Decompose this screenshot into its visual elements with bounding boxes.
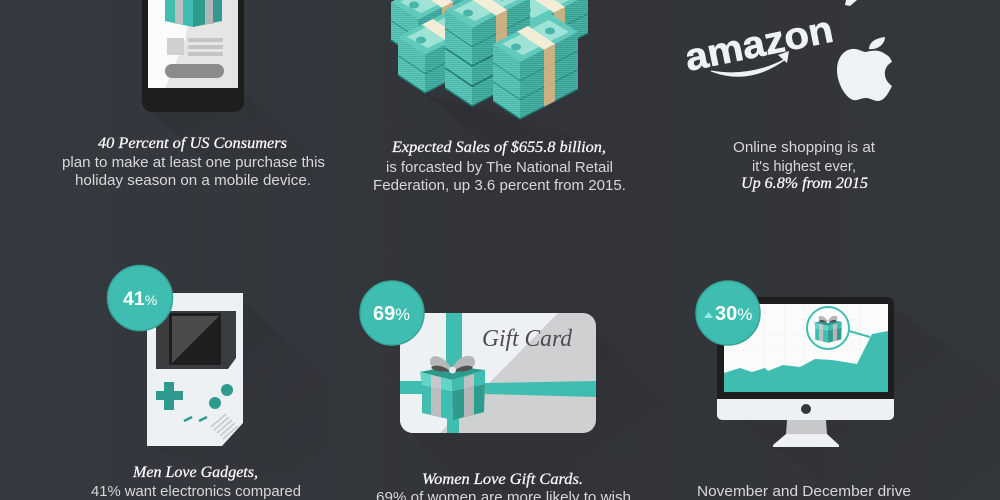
chart grid xyxy=(724,304,888,392)
text: mobile shoppers: plan to make at least one purchase this xyxy=(62,155,325,171)
text: expected sales: Federation, up 3.6 percent from 2015. xyxy=(373,178,626,194)
monitor chin xyxy=(717,399,894,420)
text: expected sales: Expected Sales of $655.8 billion, xyxy=(391,139,606,156)
magnifier lens xyxy=(807,307,870,349)
text: women love gift cards: Women Love Gift Cards. xyxy=(422,471,583,488)
badge: 41% xyxy=(108,266,172,330)
phone screen xyxy=(148,0,238,88)
brand logos xyxy=(681,0,892,101)
badge: up 30% xyxy=(696,281,760,345)
amazon logo: amazon xyxy=(681,9,837,80)
phone illustration xyxy=(142,0,330,190)
text: mobile shoppers xyxy=(62,135,325,189)
front stack xyxy=(493,14,578,119)
console screen xyxy=(169,313,221,365)
monitor bezel xyxy=(717,297,894,399)
console speaker xyxy=(211,414,238,439)
text: men love gadgets: 41% want electronics compared xyxy=(91,484,301,500)
center stack xyxy=(445,0,530,106)
card shadow xyxy=(410,330,680,490)
game console illustration xyxy=(108,266,330,480)
product placeholder xyxy=(167,38,223,56)
badge: up 30%: 30% xyxy=(715,303,752,325)
text: online shopping xyxy=(733,140,875,192)
money shadow xyxy=(425,94,610,175)
text: expected sales: is forcasted by The National Retail xyxy=(386,160,613,176)
card xyxy=(400,313,596,433)
badge: 41%: 41% xyxy=(123,288,157,310)
phone body xyxy=(142,0,244,112)
left stack xyxy=(398,7,483,93)
area chart xyxy=(724,331,888,392)
phone gift xyxy=(165,0,222,27)
console buttons xyxy=(184,384,233,421)
back right stack xyxy=(503,0,588,63)
apple logo xyxy=(837,37,892,101)
text: men love gadgets xyxy=(91,464,301,500)
phone long shadow xyxy=(150,90,330,190)
text: online shopping: Online shopping is at xyxy=(733,140,875,156)
card gift xyxy=(420,356,485,420)
console screen bezel xyxy=(156,311,236,369)
badge: 69%: 69% xyxy=(373,303,410,325)
buy button xyxy=(165,64,224,78)
card ribbons xyxy=(400,313,596,433)
text: online shopping: it's highest ever, xyxy=(752,159,856,175)
card highlight xyxy=(400,313,558,433)
logo fragment xyxy=(845,0,857,6)
directional pad xyxy=(156,382,183,410)
console body xyxy=(147,293,243,446)
monitor shadow xyxy=(740,297,1000,500)
text: november and december: November and December drive xyxy=(697,484,911,500)
money stacks illustration xyxy=(391,0,610,175)
console shadow xyxy=(147,300,330,480)
monitor home button xyxy=(801,404,811,414)
text: online shopping: Up 6.8% from 2015 xyxy=(741,175,868,192)
monitor screen xyxy=(724,304,888,392)
text: women love gift cards xyxy=(376,471,631,500)
text: men love gadgets: Men Love Gadgets, xyxy=(132,464,258,481)
gift card illustration xyxy=(360,281,680,490)
monitor stand xyxy=(773,420,839,447)
back left stack xyxy=(391,0,476,58)
text: expected sales xyxy=(373,139,626,194)
badge: 69% xyxy=(360,281,424,345)
text: mobile shoppers: holiday season on a mobile device. xyxy=(75,173,311,189)
card label: Gift Card xyxy=(482,326,573,352)
text: mobile shoppers: 40 Percent of US Consumers xyxy=(98,135,287,152)
desktop monitor illustration xyxy=(696,281,1000,500)
